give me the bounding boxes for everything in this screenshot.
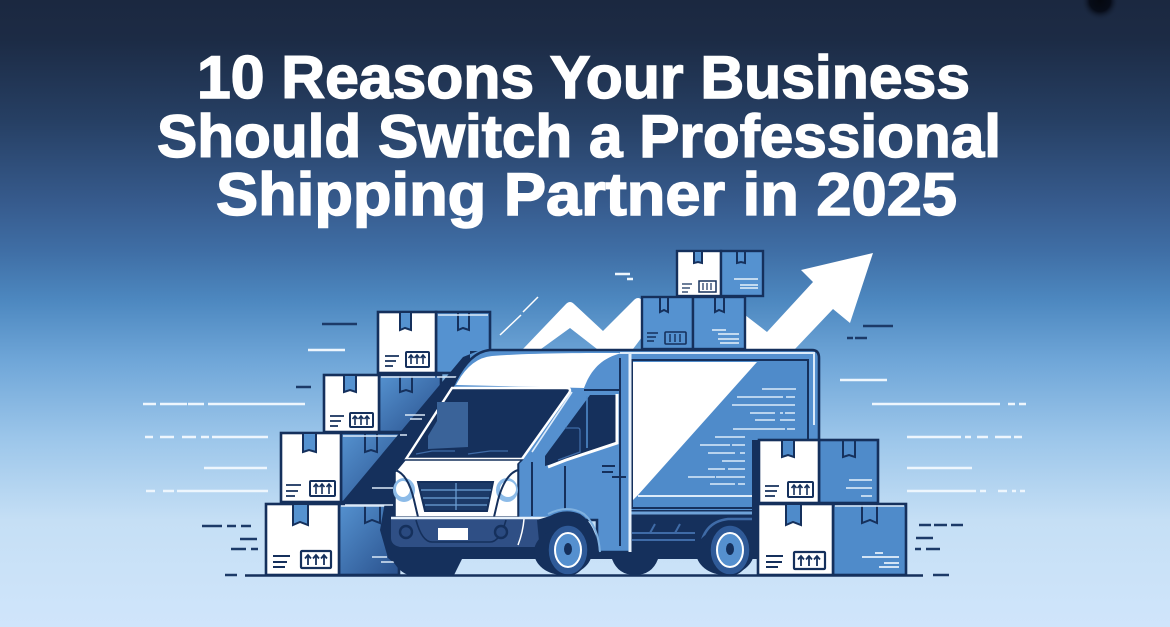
- windshield reflection: [428, 402, 468, 449]
- title: Shipping Partner in 2025: [216, 161, 957, 228]
- dark strip behind boxes: [752, 440, 760, 540]
- front base: [391, 540, 470, 575]
- box row 2 white: [324, 375, 379, 432]
- headlights: [393, 470, 518, 517]
- box: lower left blue: [642, 297, 693, 349]
- van undercarriage: [391, 540, 760, 559]
- cargo body and cab: [452, 350, 819, 552]
- box row 1 blue: [436, 312, 490, 373]
- title: 10 Reasons Your Business: [197, 44, 970, 111]
- grille: [418, 482, 493, 511]
- box top blue: [819, 440, 878, 503]
- dark smudge top right: [1081, 0, 1119, 20]
- box row 1 white: [378, 312, 436, 373]
- box top white: [759, 440, 819, 503]
- pillar highlight: [532, 392, 572, 452]
- small highlights on shadow wedge: [345, 377, 457, 562]
- speed lines: [143, 274, 1026, 575]
- middle tyre: [612, 552, 658, 575]
- box row 3 blue: [341, 433, 403, 502]
- box row 4 blue: [339, 504, 399, 575]
- top stacked boxes: [642, 251, 763, 349]
- ground line: [245, 574, 923, 577]
- box row 4 white: [266, 504, 339, 575]
- rear wheel: [696, 525, 754, 575]
- front face: [395, 460, 522, 517]
- box: top white: [677, 251, 721, 296]
- right stacked boxes: [752, 440, 906, 575]
- box bottom white: [758, 504, 833, 575]
- van shadow wedge: [342, 351, 478, 575]
- side window: [545, 394, 617, 467]
- cargo panel: [632, 360, 808, 508]
- pillar strip: [628, 354, 632, 552]
- box: lower right blue: [693, 297, 745, 349]
- front wheel: [534, 509, 600, 575]
- box row 3 white: [281, 433, 341, 502]
- box row 2 blue: [379, 375, 441, 432]
- left stacked boxes: [266, 312, 490, 575]
- delivery van: [391, 350, 819, 575]
- windshield wiper marks: [416, 451, 508, 454]
- title: [157, 44, 1001, 228]
- cab roof: [456, 353, 622, 388]
- title: Should Switch a Professional: [157, 103, 1001, 170]
- box bottom blue: [833, 504, 906, 575]
- windshield: [406, 388, 570, 459]
- growth arrow: [500, 253, 873, 349]
- chassis: [631, 510, 760, 559]
- box: top blue: [721, 251, 763, 296]
- bumper: [391, 518, 560, 547]
- door lines: [532, 358, 626, 546]
- roof edge highlight: [620, 353, 814, 425]
